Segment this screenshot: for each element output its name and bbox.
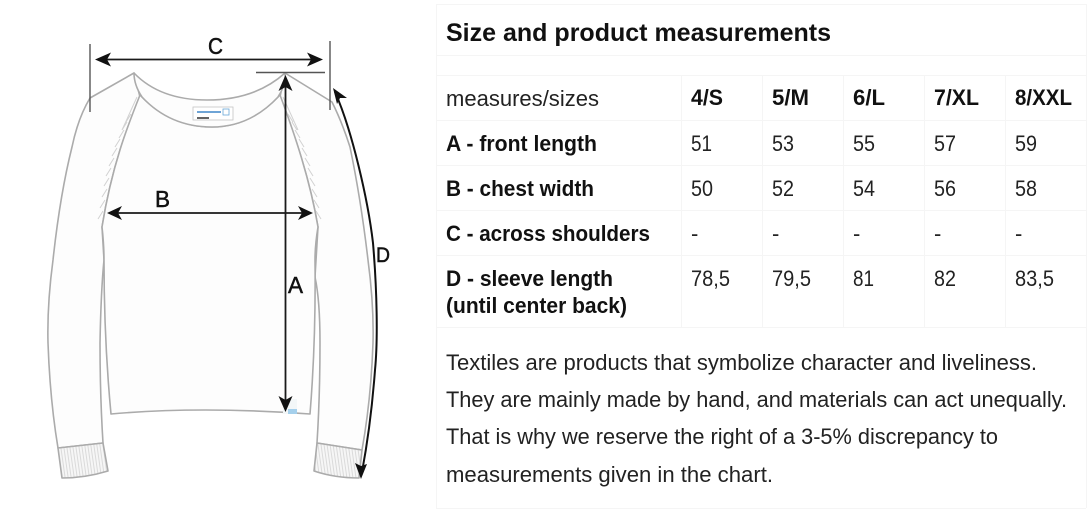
sweater diagram: [48, 73, 373, 478]
row A: 55: [853, 131, 875, 156]
row D: 82: [934, 266, 956, 291]
row B: B - chest width: [446, 176, 594, 201]
body: [102, 95, 318, 414]
disclaimer text: [446, 350, 1067, 487]
measure A: A: [288, 272, 304, 298]
row D: (until center back): [446, 293, 627, 318]
row B: 52: [772, 176, 794, 201]
header row: 7/XL: [934, 85, 979, 110]
row A: A - front length: [446, 131, 597, 156]
row D: 79,5: [772, 266, 811, 291]
row B: 54: [853, 176, 875, 201]
row A: [446, 131, 1037, 156]
measure C: C: [208, 33, 223, 59]
size table: [436, 4, 1086, 508]
row B: [446, 176, 1037, 201]
row D: [446, 266, 1054, 318]
row D: D - sleeve length: [446, 266, 613, 291]
measure B: B: [155, 186, 170, 212]
row D: 81: [853, 266, 874, 291]
table grid: [436, 4, 1086, 508]
row B: 56: [934, 176, 956, 201]
table title: Size and product measurements: [446, 19, 831, 47]
row D: 78,5: [691, 266, 730, 291]
row C: [446, 221, 1022, 246]
header row: measures/sizes: [446, 86, 599, 111]
row C: C - across shoulders: [446, 221, 650, 246]
row C: -: [1015, 221, 1022, 246]
row A: 53: [772, 131, 794, 156]
hem tag: [283, 399, 297, 414]
header row: 8/XXL: [1015, 85, 1072, 110]
row A: 57: [934, 131, 956, 156]
row A: 51: [691, 131, 712, 156]
measure C: [90, 33, 330, 112]
row C: -: [853, 221, 860, 246]
row D: 83,5: [1015, 266, 1054, 291]
measure A: [278, 75, 304, 412]
collar label: [193, 107, 233, 120]
disclaimer text: Textiles are products that symbolize character and liveliness.: [446, 350, 1037, 375]
disclaimer text: They are mainly made by hand, and materials can act unequally.: [446, 387, 1067, 412]
row B: 58: [1015, 176, 1037, 201]
measure B: [107, 186, 313, 220]
row C: -: [691, 221, 698, 246]
measure D: [333, 88, 390, 479]
raglan seam stitching: [98, 97, 321, 219]
disclaimer text: measurements given in the chart.: [446, 462, 773, 487]
left sleeve: [48, 73, 140, 478]
neckline: [134, 73, 285, 127]
header row: [446, 85, 1072, 111]
header row: 6/L: [853, 85, 885, 110]
row C: -: [934, 221, 941, 246]
disclaimer text: That is why we reserve the right of a 3-5% discrepancy to: [446, 424, 998, 449]
row B: 50: [691, 176, 713, 201]
right sleeve: [280, 73, 373, 478]
measure D: D: [376, 244, 390, 267]
row A: 59: [1015, 131, 1037, 156]
header row: 5/M: [772, 85, 809, 110]
header row: 4/S: [691, 85, 723, 110]
row C: -: [772, 221, 779, 246]
